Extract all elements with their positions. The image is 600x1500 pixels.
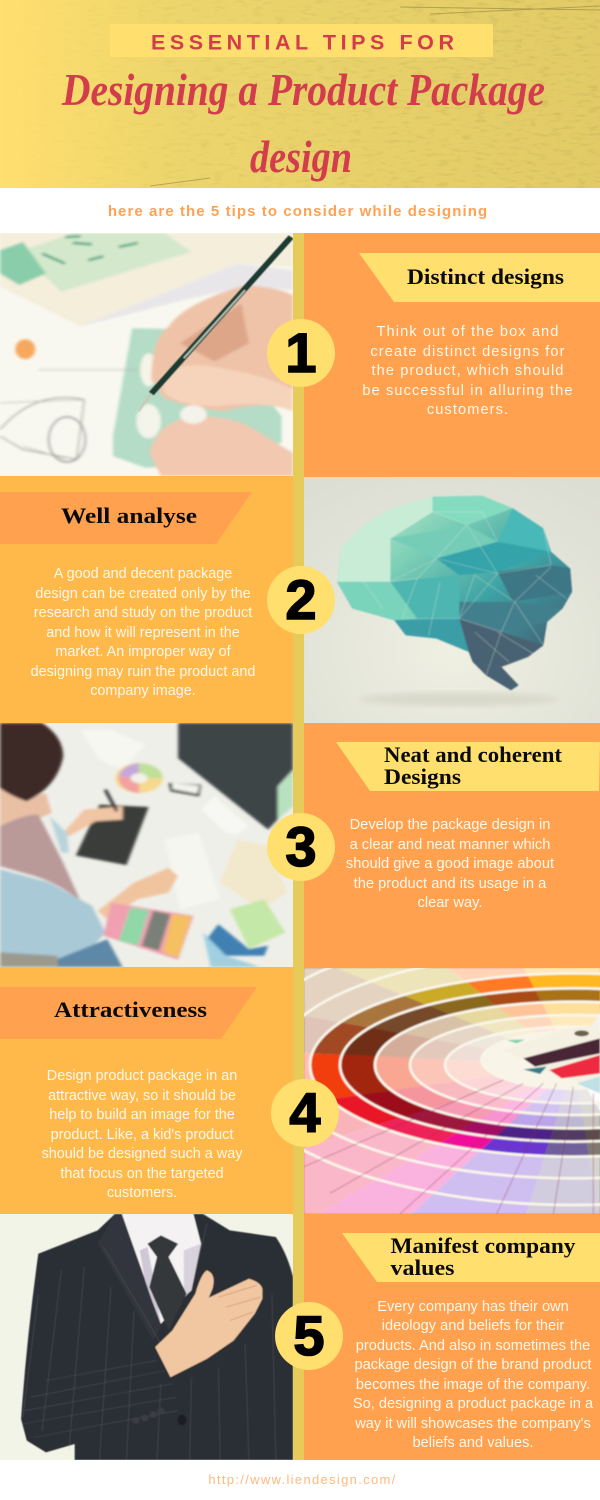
banner: essential tips for (110, 24, 493, 57)
photo: businessman with hand on chest (0, 1214, 293, 1460)
text: tip 2: and how it will represent in the (46, 625, 240, 641)
number badge 2 (267, 566, 335, 634)
heading: essential tips for: ESSENTIAL TIPS FOR (151, 30, 454, 54)
heading bar: manifest company values: values (390, 1255, 455, 1280)
text: tip 2: designing may ruin the product and (31, 664, 255, 680)
text: tip 4: help to build an image for the (49, 1107, 235, 1123)
subtitle: here are the 5 tips to consider while designing (108, 203, 488, 220)
heading bar: manifest company values (342, 1233, 600, 1282)
text: tip 3: a clear and neat manner which (350, 837, 550, 853)
text: tip 1: create distinct designs for (370, 344, 566, 360)
text: tip 2: market. An improper way of (55, 644, 231, 660)
panel: tip 1 (304, 233, 600, 477)
text: tip 5: way it will showcases the company's (355, 1416, 591, 1432)
text: tip 3: clear way. (417, 895, 483, 911)
text: tip 4: Design product package in an (47, 1068, 237, 1084)
text: tip 4: that focus on the targeted (60, 1166, 224, 1182)
text: tip 1 (362, 324, 574, 418)
text: tip 5: package design of the brand product (355, 1357, 591, 1373)
heading bar: neat and coherent designs (336, 742, 600, 791)
heading bar: neat and coherent designs: Designs (384, 764, 461, 789)
text: tip 5: becomes the image of the company. (356, 1377, 590, 1393)
text: tip 5: products. And also in sometimes the (356, 1338, 590, 1354)
photo: colour fan (304, 968, 600, 1214)
number badge 4: 4 (289, 1081, 321, 1144)
heading bar: manifest company values: Manifest company (390, 1233, 576, 1258)
heading bar: attractiveness (0, 987, 257, 1039)
text: tip 1: customers. (427, 402, 509, 418)
heading bar: distinct designs: Distinct designs (407, 264, 564, 289)
heading bar: distinct designs (359, 253, 600, 302)
number badge 3: 3 (285, 815, 317, 878)
title (61, 64, 545, 182)
number badge 1: 1 (285, 321, 317, 384)
text: tip 5: Every company has their own (377, 1298, 569, 1314)
panel: tip 3 (304, 723, 600, 968)
number badge 1 (267, 319, 335, 387)
text: tip 2: research and study on the product (34, 605, 252, 621)
text: tip 3: should give a good image about (346, 856, 554, 872)
photo: designer at desk (0, 723, 293, 967)
heading bar: neat and coherent designs: Neat and coherent (384, 742, 563, 767)
panel: tip 5 (304, 1214, 600, 1460)
text: tip 3: the product and its usage in a (354, 876, 546, 892)
heading bar: well analyse (0, 492, 252, 544)
text: tip 2: company image. (90, 683, 196, 699)
text: tip 4: attractive way, so it should be (48, 1088, 236, 1104)
text: tip 4: product. Like, a kid's product (51, 1127, 233, 1143)
decorative strip (293, 233, 304, 1460)
text: tip 2 (31, 566, 255, 699)
number badge 5 (275, 1302, 343, 1370)
number badge 4 (271, 1079, 339, 1147)
text: tip 5: So, designing a product package in a (353, 1396, 593, 1412)
text: tip 5 (353, 1298, 594, 1451)
panel: tip 2 (0, 476, 293, 723)
text: tip 4 (42, 1068, 242, 1201)
photo: polygon brain (304, 477, 600, 723)
number badge 3 (267, 813, 335, 881)
text: tip 3 (346, 817, 554, 911)
text: tip 3: Develop the package design in (350, 817, 550, 833)
heading bar: well analyse: Well analyse (61, 503, 197, 528)
heading bar: attractiveness: Attractiveness (54, 997, 207, 1022)
text: tip 4: should be designed such a way (42, 1146, 242, 1162)
text: tip 5: beliefs and values. (413, 1435, 533, 1451)
text: tip 4: customers. (107, 1185, 177, 1201)
photo: hand sketching (0, 233, 293, 476)
number badge 2: 2 (285, 568, 317, 631)
text: tip 2: design can be created only by the (35, 586, 251, 602)
text: tip 1: the product, which should (372, 363, 564, 379)
title: design (250, 131, 352, 182)
panel: tip 4 (0, 967, 293, 1214)
number badge 5: 5 (293, 1304, 325, 1367)
text: tip 1: be successful in alluring the (362, 383, 574, 399)
footer url: http://www.liendesign.com/ (208, 1472, 397, 1487)
text: tip 2: A good and decent package (54, 566, 232, 582)
header band (0, 0, 600, 188)
text: tip 1: Think out of the box and (376, 324, 559, 340)
text: tip 5: ideology and beliefs for their (382, 1318, 564, 1334)
